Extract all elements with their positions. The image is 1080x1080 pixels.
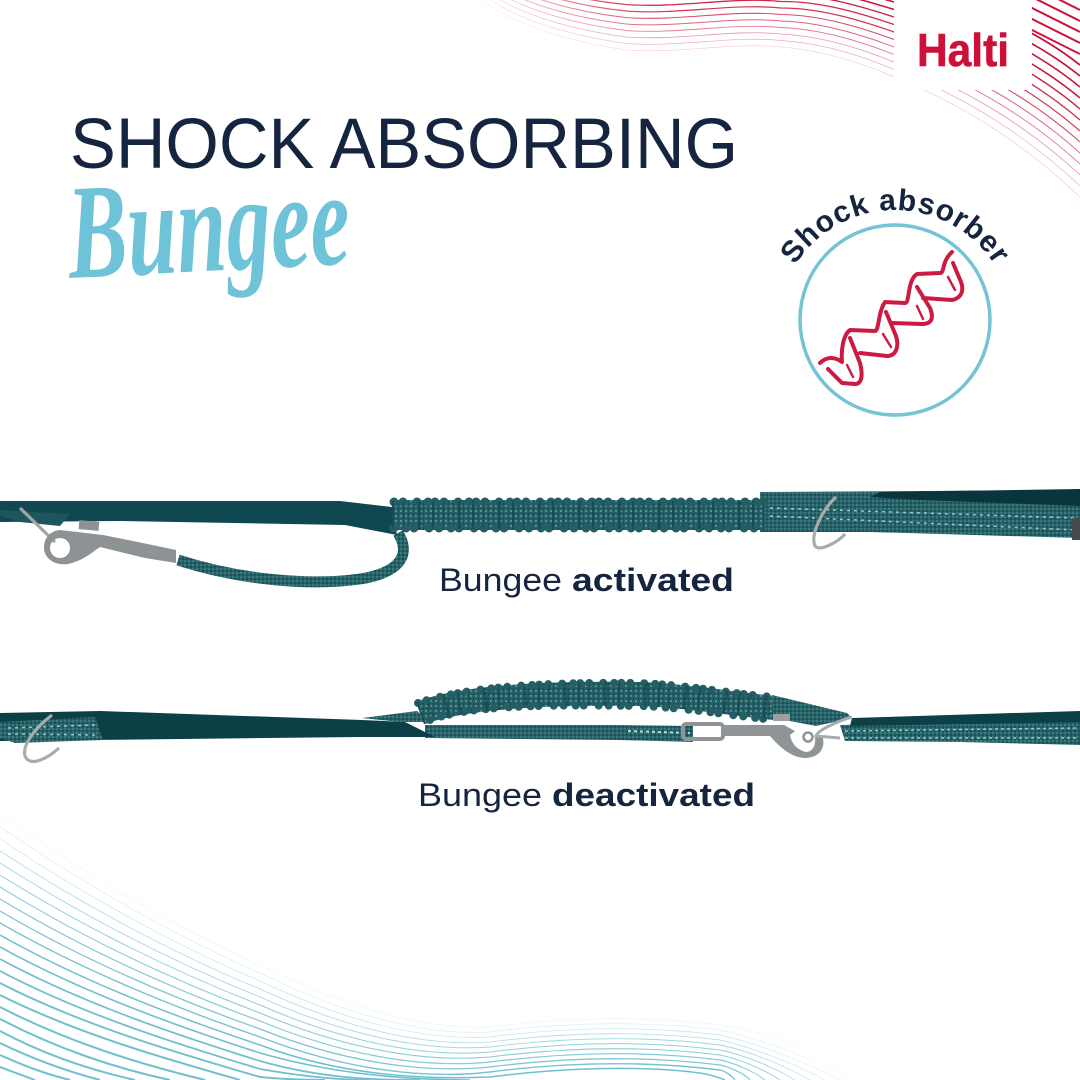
decorative wave: top right red lines [482,0,1080,197]
badge: shock absorber icon [782,188,1008,417]
bungee section [392,502,765,528]
hook body [722,725,823,758]
logo: Halti [894,0,1032,90]
leash: bungee activated [0,489,1080,582]
icon: red spring [820,252,962,384]
dark neoprene strap [0,501,397,535]
title: shock absorbing: SHOCK ABSORBING [70,105,738,184]
tag [1072,518,1080,540]
hook gate [773,714,790,721]
thin lower strap [425,725,693,742]
rope loop [178,533,403,582]
leash: bungee deactivated [0,683,1080,761]
left webbing scrap [0,510,70,526]
stitching on thin strap [628,731,690,733]
right webbing [840,720,1080,745]
small ring strap [20,508,55,542]
right webbing [760,490,1080,538]
label: bungee deactivated: deactivated [552,777,755,813]
label: bungee activated [439,562,734,598]
snap hook [44,530,176,564]
subtitle: Bungee script: Bungee [62,144,353,308]
upper webbing stub [362,711,430,722]
reflective stitching [770,508,1075,530]
label: bungee deactivated [418,777,755,813]
clip tab [79,520,99,531]
curved badge label: Shock absorber [782,188,1008,262]
neoprene top band [870,489,1080,506]
label: bungee deactivated: Bungee [418,777,542,813]
decorative wave: bottom left teal lines [0,815,868,1080]
D ring [814,497,845,548]
left stitching [8,725,95,735]
D ring left [25,715,59,761]
hook loop [683,724,723,739]
badge circle [800,225,990,415]
bungee section [418,683,775,720]
dark neoprene strap [0,711,435,741]
right bungee webbing [772,695,852,726]
hook pin [804,732,812,742]
D ring right [816,717,852,738]
label: bungee activated: activated [572,562,734,598]
right neoprene band [850,711,1080,726]
label: bungee activated: Bungee [439,562,562,598]
left webbing tab [0,717,103,743]
logo: Halti: Halti [917,24,1009,76]
snap hook [683,714,823,758]
right stitching [845,728,1078,738]
